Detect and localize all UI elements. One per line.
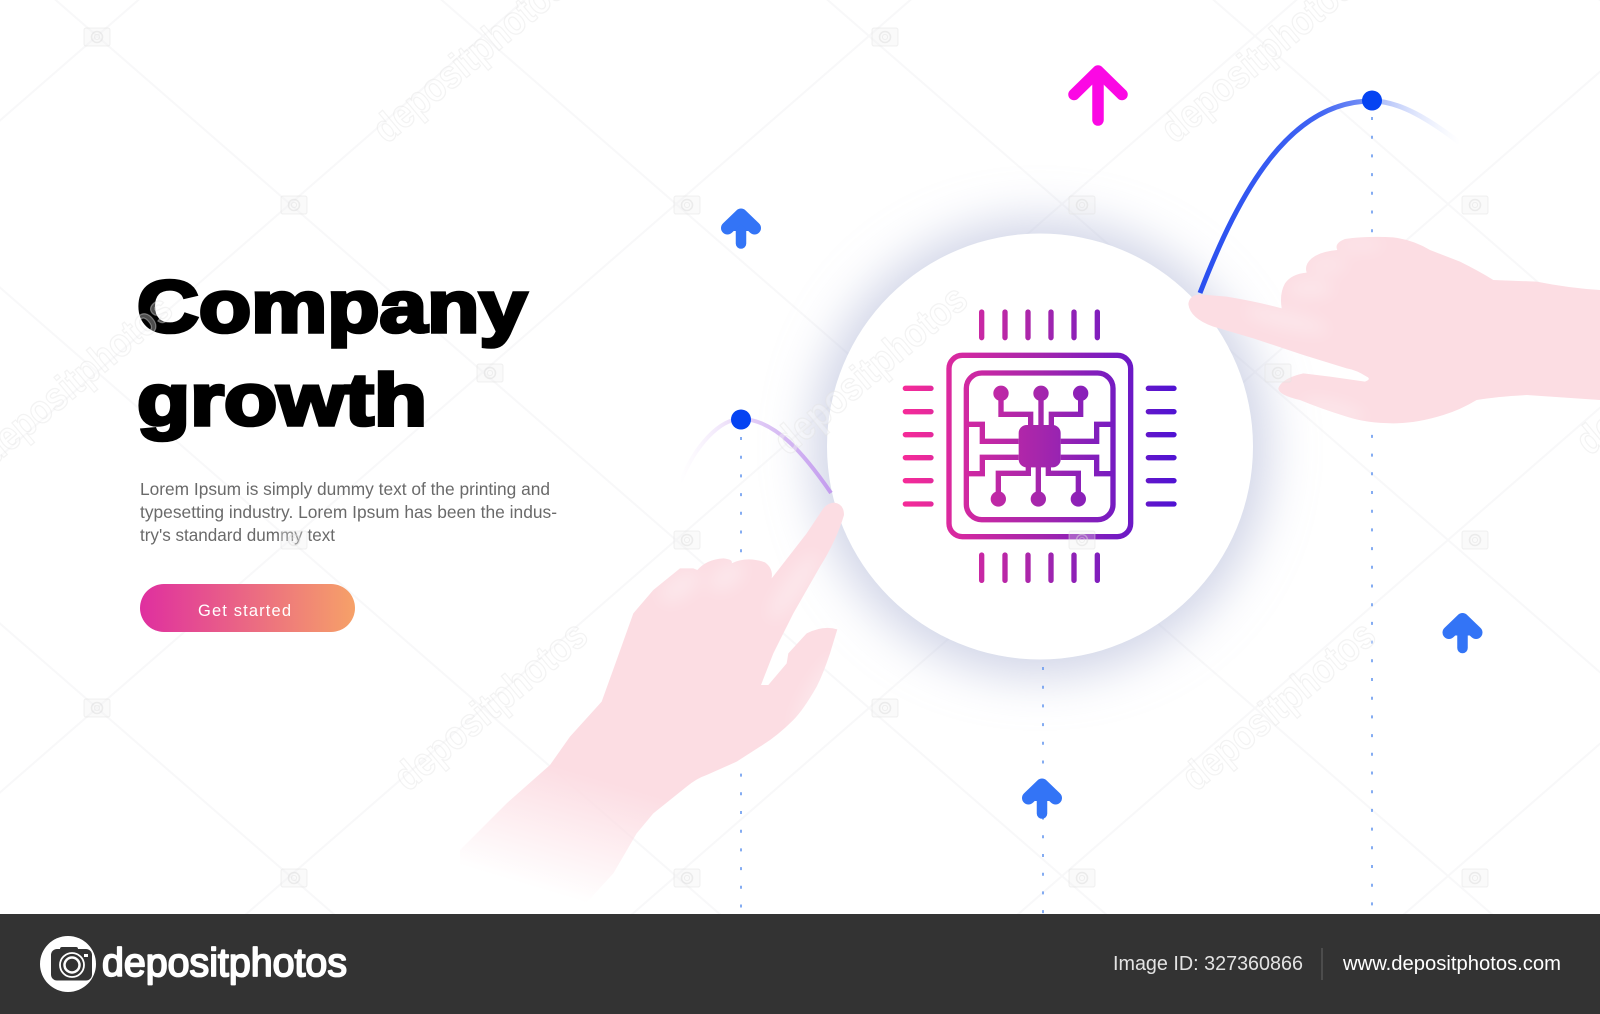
arrow: blue bottom centre xyxy=(1028,785,1056,814)
body text: Lorem Ipsum is simply dummy text of the printing and xyxy=(140,479,550,499)
icon: microchip xyxy=(905,312,1174,580)
watermark text: depositphotos xyxy=(765,277,976,463)
website url: www.depositphotos.com xyxy=(1342,953,1561,975)
growth curve: right xyxy=(1200,101,1460,293)
growth curve: left xyxy=(680,419,831,493)
curve point: left xyxy=(731,410,751,430)
footer bar xyxy=(0,914,1600,1014)
image id: Image ID: 327360866 xyxy=(1113,953,1303,975)
chip core and nodes xyxy=(991,386,1088,507)
footer logo icon xyxy=(40,936,96,992)
body text: typesetting industry. Lorem Ipsum has been the indus- xyxy=(140,502,557,522)
circle glow shadow xyxy=(812,220,1268,676)
chip inner frame xyxy=(966,373,1113,520)
chip circuit traces xyxy=(968,393,1111,499)
arrow: magenta top xyxy=(1074,71,1122,120)
arrow: blue upper left xyxy=(728,215,754,244)
title: growth xyxy=(137,360,427,441)
watermark camera icons xyxy=(84,28,1488,887)
watermark text: depositphotos xyxy=(1173,613,1384,799)
chip outer frame xyxy=(949,355,1131,537)
button: get started xyxy=(140,584,355,632)
chip pins xyxy=(905,312,1174,580)
title xyxy=(137,267,527,441)
white central circle xyxy=(827,234,1253,660)
button: get started: Get started xyxy=(198,602,291,620)
body text xyxy=(140,479,557,545)
dotted guide lines xyxy=(741,117,1372,914)
hand: left pointing up xyxy=(472,502,844,878)
watermark text xyxy=(0,0,1600,799)
watermark text: depositphotos xyxy=(385,613,596,799)
hand: right pointing left xyxy=(1188,237,1600,426)
arrow: blue right xyxy=(1449,620,1476,648)
body text: try's standard dummy text xyxy=(140,525,335,545)
title: Company xyxy=(137,267,527,348)
footer logo wordmark: depositphotos xyxy=(102,941,347,985)
curve point: right xyxy=(1362,90,1382,110)
